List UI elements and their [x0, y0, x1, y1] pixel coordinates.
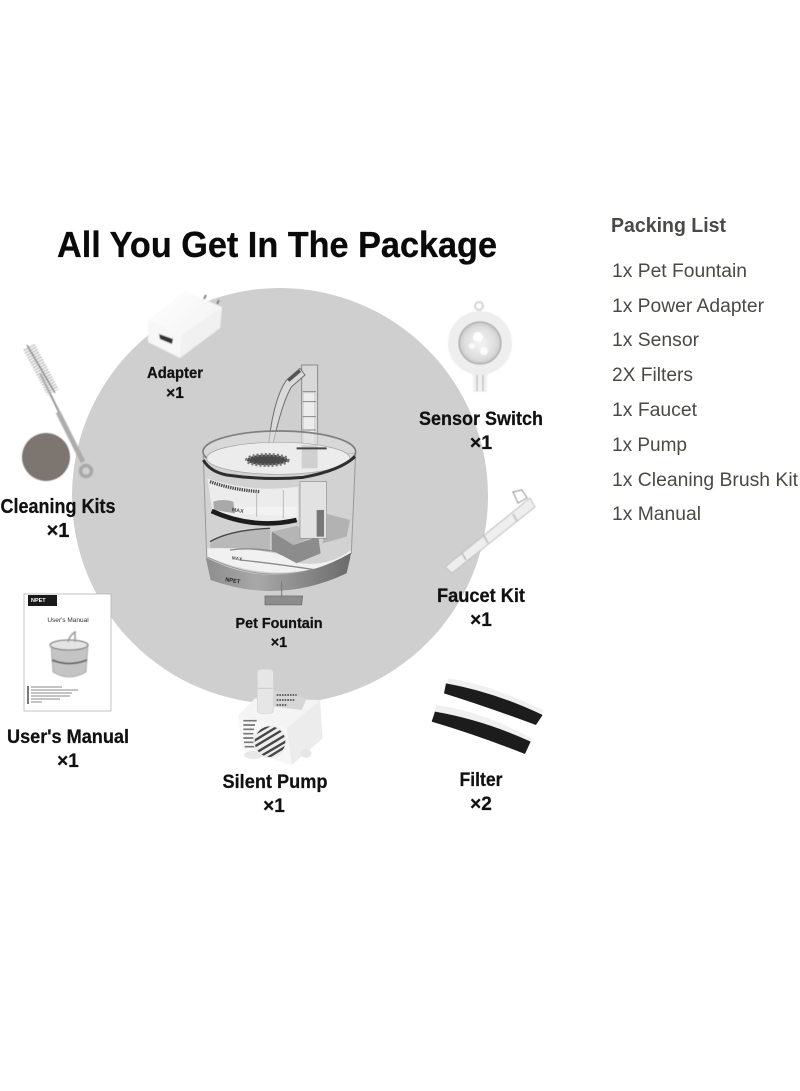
- label: silent pump: Silent Pump: [222, 772, 328, 793]
- packing list items: 2X Filters: [612, 365, 693, 386]
- base tab: [265, 596, 303, 605]
- packing list items: 1x Power Adapter: [612, 296, 765, 317]
- packing list items: 1x Cleaning Brush Kit: [612, 470, 799, 491]
- tower and spout: [268, 365, 318, 450]
- label: adapter quantity: ×1: [166, 385, 184, 402]
- packing list items: 1x Pump: [612, 435, 687, 456]
- base: [206, 553, 351, 591]
- label: pet fountain quantity: ×1: [271, 635, 287, 651]
- pump in bowl: [272, 526, 318, 545]
- icon: faucet kit: [445, 490, 535, 573]
- label: faucet kit: Faucet Kit: [437, 586, 526, 607]
- packing list items: 1x Manual: [612, 504, 701, 525]
- icon: filter: [432, 678, 543, 754]
- icon: cleaning sponge: [22, 433, 70, 481]
- packing list items: 1x Sensor: [612, 330, 700, 351]
- manual fountain image: [50, 632, 88, 677]
- bowl glass: [203, 453, 356, 574]
- tray max text: MAX: [231, 507, 244, 515]
- label: pet fountain: Pet Fountain: [236, 616, 322, 632]
- fountain brand: NPET: [225, 577, 241, 586]
- packing list: [611, 215, 799, 525]
- column: [300, 482, 327, 538]
- label: sensor switch: Sensor Switch: [419, 408, 543, 430]
- label: filter: Filter: [460, 770, 503, 791]
- label: adapter: Adapter: [147, 365, 203, 382]
- background circle: [72, 288, 488, 704]
- packing list heading: Packing List: [611, 215, 726, 237]
- manual brand: NPET: [31, 598, 46, 604]
- label: filter quantity: ×2: [470, 794, 492, 815]
- rim: [203, 431, 356, 479]
- icon: adapter: [148, 291, 222, 358]
- upper tray: [207, 478, 298, 522]
- packing list items: [612, 261, 799, 525]
- label: user's manual: User's Manual: [7, 727, 129, 748]
- icon: sensor switch: [448, 302, 512, 392]
- filter grit: [247, 455, 288, 465]
- label: user's manual quantity: ×1: [57, 751, 79, 772]
- icon: pet fountain: [203, 365, 356, 605]
- title: All You Get In The Package: [57, 224, 497, 265]
- manual title: User's Manual: [47, 617, 89, 624]
- lower reservoir: [210, 529, 270, 553]
- label: faucet kit quantity: ×1: [470, 610, 492, 631]
- icon: cleaning brush: [27, 345, 92, 476]
- packing list items: 1x Pet Fountain: [612, 261, 747, 282]
- icon: user's manual: [24, 594, 111, 711]
- icon: silent pump: [238, 669, 323, 765]
- label: silent pump quantity: ×1: [263, 796, 285, 817]
- label: sensor switch quantity: ×1: [470, 432, 492, 454]
- label: cleaning kits quantity: ×1: [47, 520, 69, 542]
- packing list items: 1x Faucet: [612, 400, 698, 421]
- label: cleaning kits: Cleaning Kits: [0, 496, 116, 518]
- reservoir max text: MAX: [232, 555, 243, 562]
